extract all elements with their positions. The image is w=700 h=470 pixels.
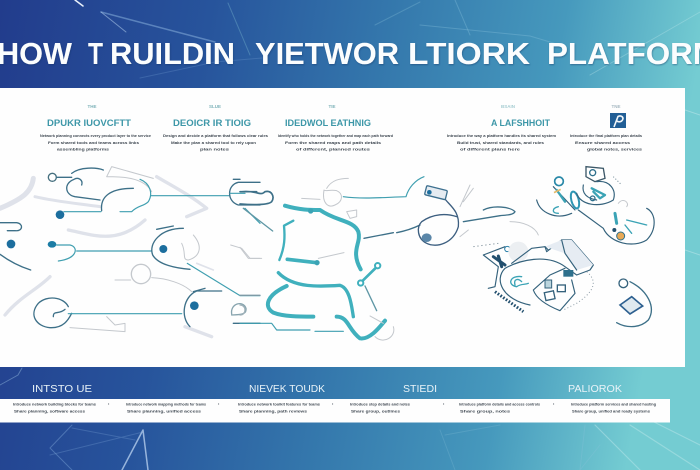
- column 3 header: of different, planned routes: [296, 148, 370, 152]
- footer descriptions: Introduce network building blocks for teams: [13, 402, 96, 406]
- network diagram: left hooks: [0, 167, 260, 332]
- footer white strip: [0, 399, 670, 422]
- footer descriptions: •: [218, 402, 220, 406]
- network diagram: teal ribbon path: [240, 177, 458, 340]
- middle hook cluster: [0, 223, 260, 296]
- column 2 header: SLUE: [209, 104, 221, 109]
- footer descriptions: •: [443, 402, 445, 406]
- column 3 header: TIE: [328, 104, 336, 109]
- footer descriptions: Share planning, path reviews: [239, 410, 307, 414]
- column 5 header: Introduce the final platform plan details: [570, 134, 642, 138]
- title: LTIORK: [408, 36, 531, 71]
- footer descriptions: Introduce network mapping methods for teams: [126, 402, 206, 406]
- footer descriptions: Share group, outlines: [351, 410, 400, 414]
- footer descriptions: •: [332, 402, 334, 406]
- column 5 header: [570, 104, 642, 152]
- column 5 header: Ensure shared access: [575, 141, 630, 145]
- title: T: [88, 36, 103, 71]
- footer section titles: PALIOROK: [568, 383, 622, 395]
- column 3 header: [278, 104, 393, 152]
- title: [0, 36, 700, 71]
- footer descriptions: Introduce step details and notes: [350, 402, 410, 406]
- footer descriptions: Introduce platform services and shared hosting: [571, 402, 656, 406]
- footer section titles: INTSTO UE: [32, 383, 92, 395]
- white content panel: [0, 88, 685, 367]
- connector hook: [460, 185, 538, 237]
- column 1 header: assembling platforms: [57, 148, 109, 152]
- footer section titles: [32, 383, 622, 395]
- footer descriptions: Introduce platform details and access controls: [459, 402, 540, 406]
- network diagram: right platform icons: [460, 167, 654, 327]
- icon: platform logo: [610, 113, 626, 128]
- column 2 header: DEOICR IR TIOIG: [173, 118, 251, 129]
- column 4 header: Build trust, shared standards, and rules: [457, 141, 544, 145]
- column 2 header: [163, 104, 268, 152]
- column 4 header: A LAFSHHOIT: [491, 118, 550, 129]
- footer descriptions: Introduce network toolkit features for teams: [238, 402, 320, 406]
- footer descriptions: [13, 402, 656, 414]
- column 1 header: DPUKR IUOVCFTT: [47, 118, 131, 129]
- column 5 header: global notes, services: [587, 148, 642, 152]
- column 2 header: Design and decide a platform that follows clear rules: [163, 134, 268, 138]
- grey shadow strokes: [0, 177, 213, 337]
- column 3 header: IDEDWOL EATHNIG: [285, 118, 371, 129]
- column 1 header: Form shared tools and teams across links: [48, 141, 139, 145]
- column 5 header: TNE: [612, 104, 620, 109]
- footer descriptions: •: [108, 402, 110, 406]
- footer descriptions: Share planning, unified access: [127, 410, 201, 414]
- upper hook cluster: [48, 167, 260, 223]
- footer section titles: NIEVEK TOUDK: [249, 383, 325, 395]
- upper cloud of nodes: [537, 167, 654, 244]
- footer descriptions: Share group, unified and ready systems: [572, 410, 650, 414]
- footer descriptions: Share group, notes: [460, 410, 510, 414]
- title: YIETWOR: [255, 36, 399, 71]
- footer section titles: STIEDI: [403, 383, 437, 395]
- column 1 header: Network planning connects every product layer to the service: [40, 134, 151, 138]
- column 1 header: THE: [88, 104, 96, 109]
- footer descriptions: •: [553, 402, 555, 406]
- footer descriptions: Share planning, software access: [14, 410, 85, 414]
- column 4 header: of different plans here: [460, 148, 520, 152]
- column 3 header: Form the shared maps and path details: [285, 141, 381, 145]
- lower hook cluster: [34, 288, 260, 332]
- lower-right device icon: [617, 279, 651, 327]
- central platform map: [473, 240, 593, 312]
- column 2 header: Make the plan a shared tool to rely upon: [171, 141, 256, 145]
- column 4 header: BSAIN: [501, 104, 515, 109]
- column 4 header: [447, 104, 556, 152]
- column 1 header: [40, 104, 151, 152]
- column 3 header: Identify who holds the network together and map each path forward: [278, 134, 393, 138]
- title: RUILDIN: [110, 36, 235, 71]
- column 2 header: plan notes: [200, 148, 229, 152]
- column 4 header: Introduce the way a platform handles its shared system: [447, 134, 556, 138]
